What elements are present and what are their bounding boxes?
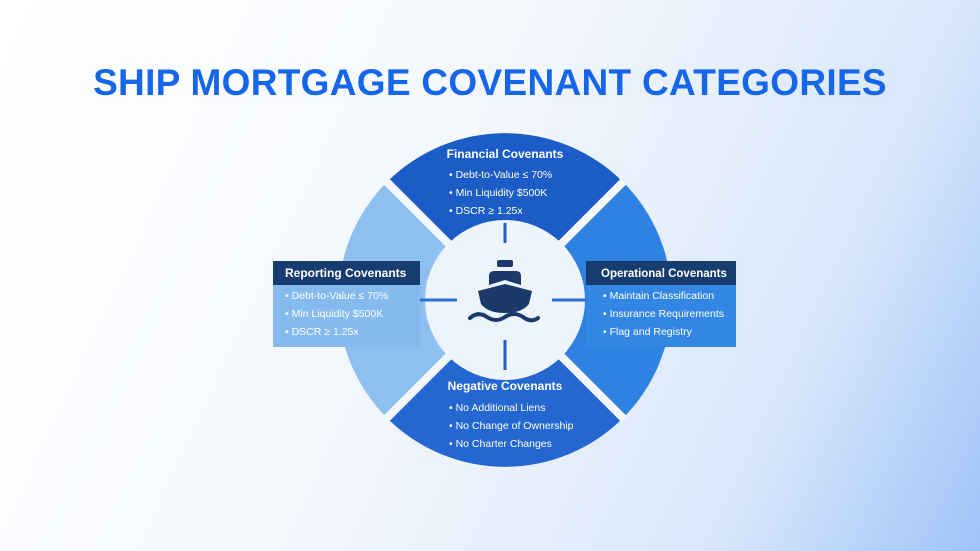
text: negative covenants: • No Additional Liens	[449, 402, 546, 414]
panel: reporting covenants: • DSCR ≥ 1.25x	[285, 326, 359, 338]
segment: reporting (left)	[338, 182, 505, 418]
panel: reporting covenants: Reporting Covenants	[285, 266, 407, 280]
segment: financial (top)	[387, 133, 623, 300]
panel: operational covenants: Operational Covenants	[601, 268, 727, 280]
panel: reporting covenants: • Min Liquidity $500K	[285, 308, 383, 320]
text: negative covenants: • No Change of Ownership	[449, 420, 574, 432]
segment: negative (bottom)	[387, 300, 623, 467]
text: financial covenants: • Debt-to-Value ≤ 70%	[449, 169, 552, 181]
panel: operational covenants	[586, 261, 736, 347]
title: SHIP MORTGAGE COVENANT CATEGORIES	[93, 62, 887, 103]
panel: operational covenants: • Insurance Requirements	[603, 308, 724, 320]
segment: operational (right)	[505, 182, 672, 418]
panel: operational covenants: • Maintain Classification	[603, 290, 714, 302]
text: financial covenants: • Min Liquidity $500K	[449, 187, 547, 199]
text: financial covenants: Financial Covenants	[447, 147, 564, 161]
panel: reporting covenants	[273, 261, 420, 347]
panel: operational covenants: • Flag and Registry	[603, 326, 693, 338]
icon: ship	[470, 260, 538, 320]
text: negative covenants: Negative Covenants	[448, 379, 563, 393]
center circle	[425, 220, 585, 380]
text: financial covenants: • DSCR ≥ 1.25x	[449, 205, 523, 217]
text: negative covenants: • No Charter Changes	[449, 438, 552, 450]
text: financial covenants	[447, 147, 564, 217]
text: negative covenants	[448, 379, 574, 450]
panel: reporting covenants: • Debt-to-Value ≤ 70%	[285, 290, 388, 302]
